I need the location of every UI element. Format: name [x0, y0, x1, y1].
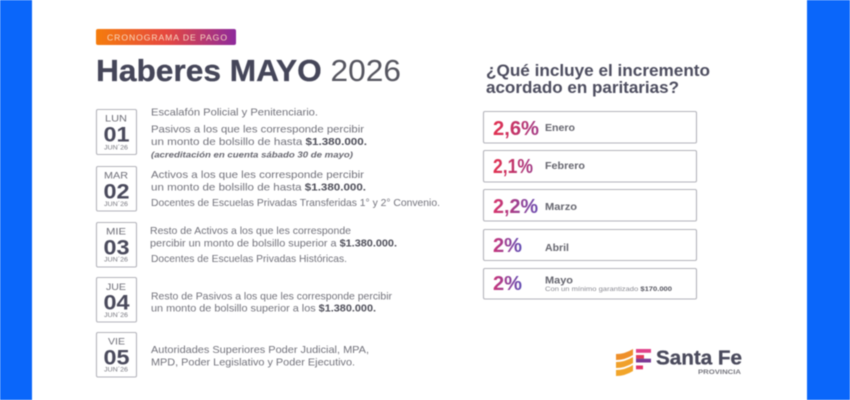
text block: lunes: un monto de bolsillo de hasta $1.380.000. [151, 137, 367, 148]
card: mayo: Con un mínimo garantizado $170.000 [545, 286, 673, 293]
icon: Santa Fe stripes [616, 349, 651, 376]
text block: viernes: MPD, Poder Legislativo y Poder Ejecutivo. [151, 358, 355, 368]
card: febrero: Febrero [545, 161, 585, 172]
date: lunes 01: 01 [104, 124, 130, 146]
date: viernes 05: VIE [108, 336, 125, 346]
text block: viernes [151, 345, 369, 368]
card: marzo: Marzo [545, 202, 577, 213]
date: viernes 05: 05 [104, 346, 130, 370]
text block: viernes: Autoridades Superiores Poder Judicial, MPA, [151, 345, 369, 356]
card: febrero [484, 150, 696, 182]
blue side band right [807, 0, 850, 400]
text block: miercoles: Resto de Activos a los que les corresponde [150, 226, 351, 237]
date: viernes 05 [96, 332, 136, 377]
date: jueves 04: JUE [106, 282, 126, 292]
text block: martes: Docentes de Escuelas Privadas Transferidas 1° y 2° Convenio. [151, 198, 440, 209]
card: abril: 2% [493, 234, 522, 257]
date: lunes 01 [96, 110, 136, 154]
heading: increment question: acordado en paritarias? [486, 79, 679, 97]
text block: martes: Activos a los que les corresponde percibir [151, 170, 365, 181]
date: viernes 05: JUN´26 [104, 366, 129, 374]
text block: lunes [151, 108, 367, 160]
date: jueves 04: JUN´26 [104, 312, 129, 319]
heading: increment question: ¿Qué incluye el incremento [486, 62, 710, 80]
date: lunes 01: JUN´26 [104, 144, 129, 152]
card: mayo [484, 268, 696, 299]
text block: jueves second line: un monto de bolsillo superior a los $1.380.000. [151, 304, 376, 314]
blue side band left [0, 0, 32, 400]
card: mayo: 2% [493, 272, 522, 295]
card: abril: Abril [545, 243, 569, 254]
text block: miercoles [150, 226, 397, 265]
card: enero [484, 112, 696, 143]
card: enero: 2,6% [493, 117, 539, 140]
logo: Santa Fe Provincia: Santa Fe [656, 348, 742, 370]
title: Haberes MAYO 2026 [96, 53, 401, 88]
badge: cronograma de pago [96, 29, 236, 45]
date: martes 02: MAR [104, 170, 129, 180]
date: lunes 01: LUN [105, 114, 127, 124]
card: abril [484, 230, 696, 260]
date: miercoles 03: 03 [104, 236, 130, 260]
text block: martes [151, 170, 440, 209]
date: miercoles 03: MIE [106, 226, 126, 236]
text block: lunes: (acreditación en cuenta sábado 30 de mayo) [151, 150, 353, 160]
date: jueves 04: 04 [104, 292, 130, 314]
card: marzo: 2,2% [493, 195, 538, 218]
card: febrero: 2,1% [493, 155, 533, 178]
card: enero: Enero [545, 123, 575, 134]
text block: lunes: Escalafón Policial y Penitenciario. [151, 108, 318, 118]
text block: miercoles: Docentes de Escuelas Privadas Históricas. [151, 254, 347, 265]
logo: Santa Fe Provincia: PROVINCIA [698, 370, 742, 376]
card: mayo: Mayo [545, 276, 573, 286]
text block: martes: un monto de bolsillo de hasta $1.380.000. [151, 182, 366, 194]
text block: miercoles: percibir un monto de bolsillo superior a $1.380.000. [150, 238, 397, 250]
heading: increment question [486, 62, 710, 97]
date: martes 02: JUN´26 [104, 201, 129, 208]
badge: cronograma de pago: CRONOGRAMA DE PAGO [107, 32, 227, 42]
date: miercoles 03: JUN´26 [104, 256, 129, 264]
logo: Santa Fe Provincia [616, 348, 742, 376]
date: martes 02 [96, 166, 136, 211]
date: jueves 04 [96, 278, 136, 322]
text block: lunes: Pasivos a los que les corresponde percibir [151, 124, 365, 136]
date: martes 02: 02 [104, 180, 130, 204]
card: marzo [484, 190, 696, 221]
date: miercoles 03 [96, 222, 136, 267]
text block: jueves: Resto de Pasivos a los que les corresponde percibir [151, 292, 393, 302]
